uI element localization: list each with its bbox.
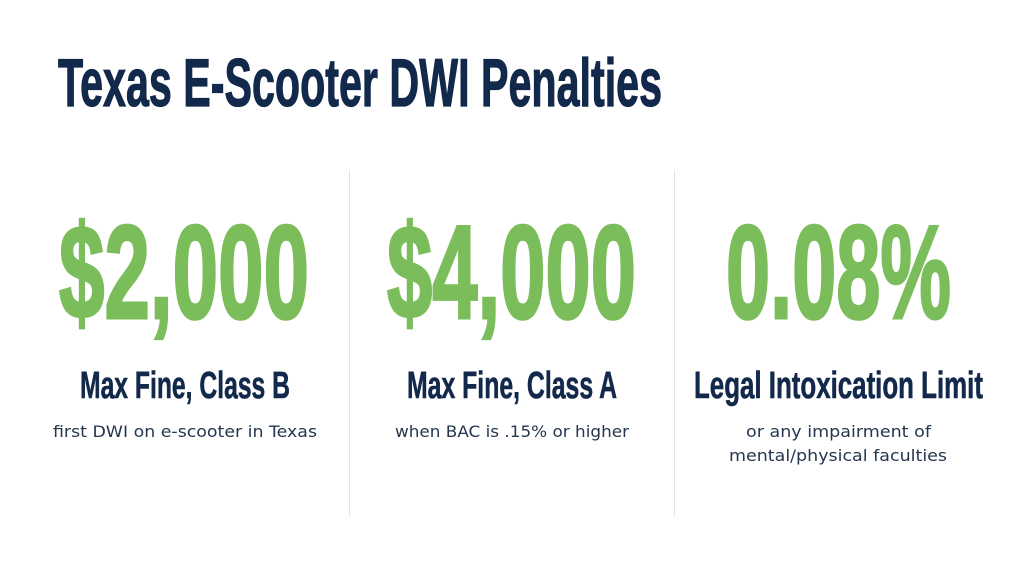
panel: Class B fine — [53, 199, 317, 441]
panel: legal limit — [694, 199, 983, 465]
description: impairment — [729, 422, 947, 465]
stat: $4,000: $4,000 — [387, 199, 636, 347]
heading: Max Fine, Class A: Max Fine, Class A — [407, 365, 617, 407]
description: impairment: mental/physical faculties — [729, 446, 947, 465]
heading: Max Fine, Class B: Max Fine, Class B — [80, 365, 290, 407]
description: impairment: or any impairment of — [746, 422, 931, 441]
panel: Class A fine — [387, 199, 636, 441]
description: first DWI: first DWI on e-scooter in Texas — [53, 422, 317, 441]
description: BAC: when BAC is .15% or higher — [395, 422, 629, 441]
stat: $2,000: $2,000 — [59, 199, 309, 347]
